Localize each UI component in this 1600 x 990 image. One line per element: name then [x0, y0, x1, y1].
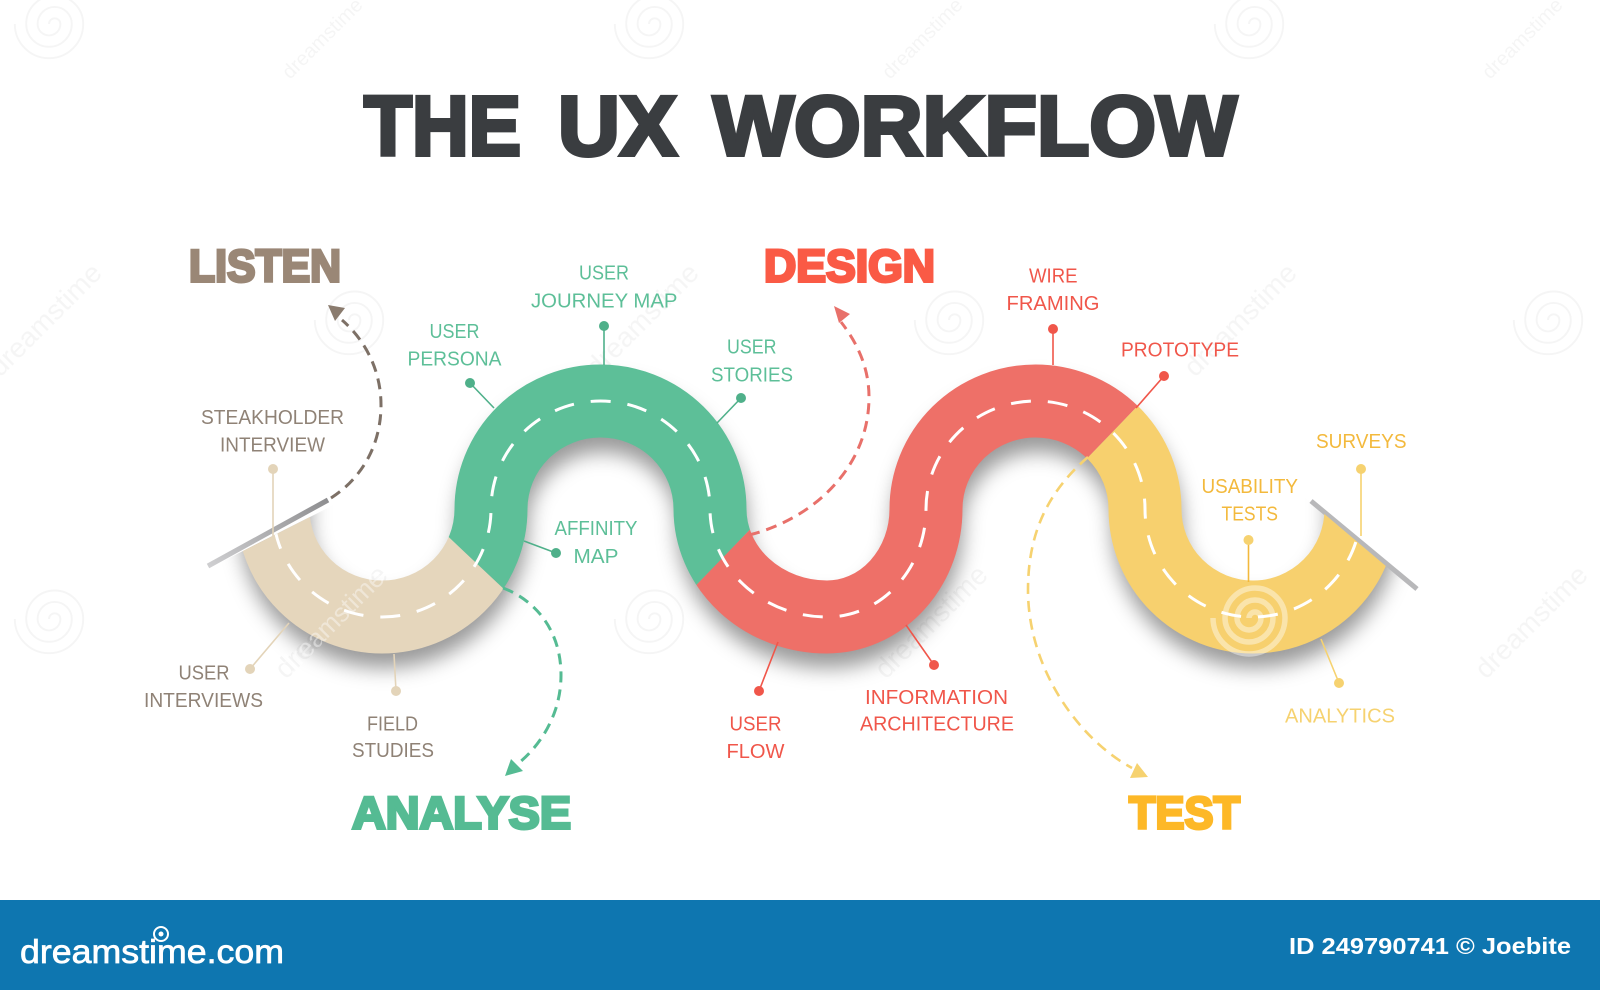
heading: test: TEST: [1129, 788, 1240, 838]
title: WORKFLOW: [713, 79, 1238, 173]
callout: user interviews: INTERVIEWS: [144, 689, 263, 712]
callout: affinity map: [524, 517, 638, 568]
callout: user persona: PERSONA: [408, 348, 502, 370]
callout: analytics: ANALYTICS: [1285, 704, 1395, 728]
callout: prototype: PROTOTYPE: [1121, 338, 1239, 362]
callout: user persona: USER: [430, 320, 480, 343]
callout: affinity map: MAP: [574, 545, 618, 568]
callout: user stories: STORIES: [711, 364, 793, 386]
title: THE: [364, 79, 521, 173]
label: steakholder interview: [201, 406, 344, 456]
callout: user flow: [726, 642, 785, 763]
heading: design: DESIGN: [764, 240, 935, 292]
watermark pattern: dreamstime: [868, 559, 994, 684]
footer bar: [0, 900, 1600, 990]
callout: user persona: [408, 320, 502, 408]
road segment: analyse: [448, 364, 750, 588]
road centre dashes: [273, 401, 1361, 617]
callout: wire framing: FRAMING: [1006, 292, 1100, 315]
dashed arrow: test: [1028, 457, 1148, 778]
callout: field studies: STUDIES: [352, 739, 434, 762]
watermark pattern: dreamstime: [579, 257, 705, 382]
watermark spiral on road: [1213, 588, 1285, 654]
callout: user stories: USER: [727, 336, 776, 358]
callout: user journey map: USER: [579, 262, 629, 284]
footer logo: dreamstime.com: [20, 933, 284, 970]
watermark pattern: dreamstime: [1468, 559, 1594, 684]
callout: usability tests: [1202, 475, 1298, 582]
callout: prototype: [1121, 338, 1239, 408]
end cut edge: [1311, 501, 1417, 589]
callout: surveys: [1316, 430, 1406, 536]
callout: user stories: [711, 336, 793, 423]
callout: information architecture: [860, 625, 1014, 736]
label: steakholder interview: INTERVIEW: [220, 434, 326, 456]
heading: analyse: ANALYSE: [352, 788, 571, 838]
callout: information architecture: ARCHITECTURE: [860, 712, 1014, 736]
dashed arrow: analyse: [503, 588, 561, 776]
callout: user flow: FLOW: [726, 740, 785, 763]
road segment: test: [1088, 406, 1386, 654]
watermark pattern: dreamstime: [1177, 257, 1303, 382]
callout: user interviews: USER: [178, 662, 230, 684]
callout: information architecture: INFORMATION: [865, 686, 1008, 709]
dashed arrow: design: [749, 306, 869, 535]
callout: wire framing: [1006, 264, 1100, 365]
leader: steakholder interview: [268, 464, 278, 540]
watermark pattern: [0, 0, 1594, 684]
dashed arrow: listen: [328, 305, 381, 498]
footer credit: ID 249790741 © Joebite: [1289, 933, 1571, 959]
callout: usability tests: USABILITY: [1202, 475, 1298, 498]
road segment: design: [696, 364, 1138, 654]
callout: field studies: [352, 654, 434, 762]
callout: usability tests: TESTS: [1222, 502, 1278, 526]
callout: affinity map: AFFINITY: [554, 517, 638, 540]
label: steakholder interview: STEAKHOLDER: [201, 406, 344, 429]
callout: wire framing: WIRE: [1029, 264, 1078, 288]
watermark text on road: dreamstime: [273, 563, 390, 680]
heading: listen: LISTEN: [189, 240, 341, 292]
callout: user journey map: [531, 262, 678, 365]
callout: user interviews: [144, 623, 289, 712]
start cut edge: [208, 500, 328, 566]
watermark pattern: dreamstime: [268, 559, 394, 684]
callout: field studies: FIELD: [367, 712, 418, 736]
title: [364, 79, 1238, 173]
callout: surveys: SURVEYS: [1316, 430, 1406, 453]
road segment: listen: [243, 517, 503, 654]
callout: analytics: [1285, 639, 1395, 728]
callout: user flow: USER: [730, 712, 782, 736]
title: UX: [558, 79, 677, 173]
road shadow: [275, 417, 1363, 633]
callout: user journey map: JOURNEY MAP: [531, 290, 678, 312]
